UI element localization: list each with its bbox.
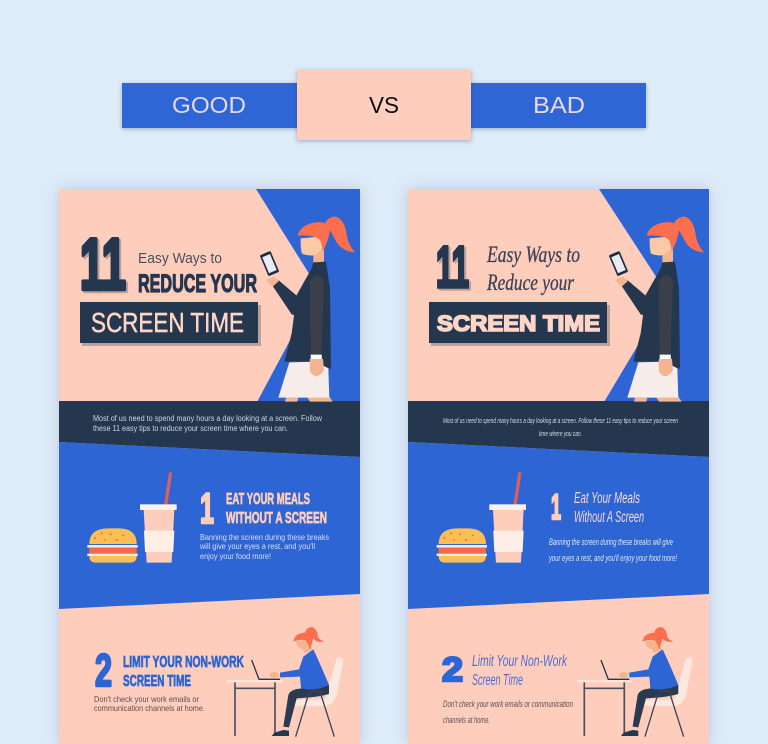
panel base: [59, 189, 360, 744]
illustration: burger and drink: [87, 472, 177, 563]
panel base: [408, 189, 709, 744]
title: easy ways to: Easy Ways to: [138, 250, 222, 267]
step 2 text: [94, 694, 205, 713]
title: 11: 11: [82, 227, 128, 307]
title: easy ways to: Easy Ways to: [486, 242, 580, 267]
chair: [641, 657, 692, 706]
chair: [292, 657, 343, 706]
step 1 text: will give your eyes a rest, and you'll: [199, 541, 315, 551]
step 1 number: 1: [551, 488, 561, 527]
title: 11: [436, 235, 471, 302]
title: reduce your: REDUCE YOUR: [138, 270, 257, 298]
title: 11: 11: [436, 235, 469, 300]
step 1 heading: EAT YOUR MEALS: [226, 491, 310, 508]
laptop: [601, 660, 629, 679]
step 2 text: Don't check your work emails or communication: [443, 699, 573, 709]
step 2 heading: [472, 653, 568, 689]
banner bar: [122, 83, 646, 128]
header: good vs bad banner: [122, 70, 646, 140]
step 1 text: enjoy your food more!: [200, 551, 271, 561]
intro text: Most of us need to spend many hours a day looking at a screen. Follow: [93, 414, 322, 423]
intro text: [443, 416, 678, 438]
illustration: woman with phone: [609, 217, 704, 402]
panel: good design: [59, 189, 360, 744]
step 2 heading: Limit Your Non-Work: [472, 653, 568, 670]
label: vs: VS: [369, 92, 399, 118]
step 1 heading: [574, 490, 644, 526]
burger: [89, 528, 137, 544]
illustration: woman at desk: [577, 627, 692, 737]
legs: [283, 685, 329, 727]
title: 11: [80, 225, 128, 307]
step 2 text: Don't check your work emails or: [94, 694, 199, 704]
cup: [144, 509, 174, 563]
label: bad: BAD: [533, 92, 585, 118]
step 1 text: Banning the screen during these breaks will give: [549, 537, 673, 547]
torso and arm: [629, 649, 678, 689]
illustration: burger and drink: [437, 472, 526, 563]
step 1 number: 1: [200, 485, 214, 533]
step 1 heading: [226, 491, 327, 527]
desk: [577, 680, 632, 682]
straw: [515, 472, 520, 505]
title: reduce your: Reduce your: [486, 270, 575, 295]
step 1 text: Banning the screen during these breaks: [200, 532, 329, 542]
step 1 text: [548, 537, 677, 563]
step 2 heading: SCREEN TIME: [123, 673, 191, 690]
title box: screen time: [429, 302, 610, 346]
step 2 number: 2: [95, 645, 112, 696]
intro text: time where you can.: [539, 429, 582, 438]
title box: screen time: [80, 302, 261, 346]
phone: [609, 251, 628, 276]
chair legs: [645, 691, 684, 737]
label: good: GOOD: [172, 92, 246, 118]
blue hero background: [599, 189, 709, 402]
step 2 text: communication channels at home.: [94, 703, 205, 713]
step 2 text: channels at home.: [443, 715, 490, 725]
title: 11: 11: [438, 237, 471, 302]
desk: [228, 680, 283, 682]
blue section: [408, 442, 709, 609]
blue hero background: [256, 189, 360, 402]
step 1 heading: Without A Screen: [574, 509, 644, 526]
chair legs: [296, 691, 334, 737]
step 2 number: 2: [442, 651, 463, 689]
step 1 text: your eyes a rest, and you'll enjoy your food more!: [548, 553, 677, 563]
head and hair: [645, 638, 662, 653]
illustration: woman with phone: [260, 217, 355, 402]
step 2 heading: Screen Time: [472, 672, 523, 689]
step 1 text: [199, 532, 329, 561]
straw: [166, 472, 171, 505]
VS box: [297, 70, 471, 140]
torso and arm: [280, 649, 329, 689]
blue section: [59, 442, 360, 609]
dark intro band: [408, 401, 709, 457]
intro text: these 11 easy tips to reduce your screen time where you can.: [93, 424, 288, 433]
head and hair: [296, 638, 312, 653]
dark intro band: [59, 401, 360, 457]
laptop: [252, 660, 280, 679]
title box: screen time: SCREEN TIME: [91, 307, 244, 338]
phone: [260, 251, 279, 276]
title box: screen time: SCREEN TIME: [437, 311, 600, 336]
step 1 heading: WITHOUT A SCREEN: [226, 510, 327, 527]
cup: [493, 509, 524, 563]
illustration: woman at desk: [228, 627, 343, 737]
title: 11: 11: [80, 225, 126, 305]
intro text: [93, 414, 322, 433]
step 1 heading: Eat Your Meals: [574, 490, 640, 507]
panel: bad design: [408, 189, 709, 744]
hands: [270, 672, 279, 678]
step 2 heading: [123, 654, 245, 690]
step 2 heading: LIMIT YOUR NON-WORK: [123, 654, 245, 671]
hands: [619, 672, 628, 678]
legs: [633, 685, 678, 727]
burger: [439, 528, 486, 544]
step 2 text: [443, 699, 573, 725]
